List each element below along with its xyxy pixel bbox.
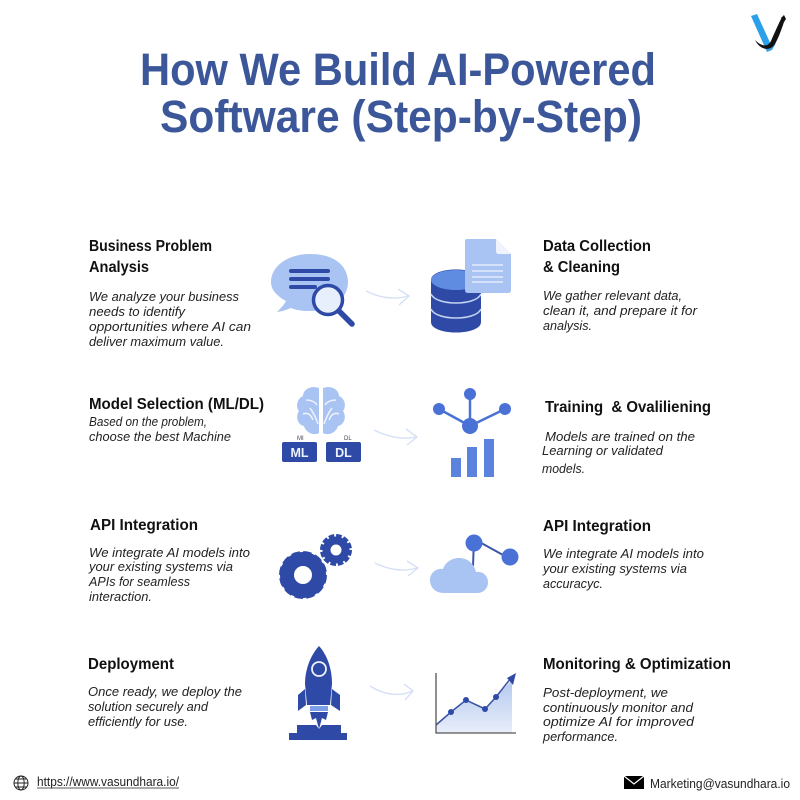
icon: database with document bbox=[431, 239, 511, 332]
step: deployment: Deployment bbox=[88, 656, 174, 673]
step: monitoring and optimization: continuously monitor and bbox=[543, 700, 694, 715]
icon: network and bar chart bbox=[433, 388, 511, 477]
step: API integration right: API Integration bbox=[543, 518, 651, 535]
step: model selection: choose the best Machine bbox=[89, 429, 231, 444]
footer: website link: https://www.vasundhara.io/ bbox=[37, 775, 179, 789]
title: How We Build AI-Powered bbox=[140, 44, 656, 95]
step: training and validation: Learning or validated bbox=[542, 443, 664, 458]
step: data collection and cleaning: analysis. bbox=[543, 318, 592, 333]
step: monitoring and optimization: Post-deployment, we bbox=[543, 685, 668, 700]
step: deployment: Once ready, we deploy the bbox=[88, 684, 242, 699]
icon: rocket bbox=[289, 646, 347, 740]
step: API integration left bbox=[88, 517, 250, 604]
step: data collection and cleaning: & Cleaning bbox=[543, 259, 620, 276]
step: business problem analysis: opportunities where AI can bbox=[89, 319, 251, 334]
icon: brain with ML and DL chips: DL bbox=[335, 446, 352, 460]
step: data collection and cleaning bbox=[543, 238, 698, 333]
step: monitoring and optimization: Monitoring & Optimization bbox=[543, 656, 731, 673]
step: API integration left: interaction. bbox=[89, 589, 152, 604]
step: business problem analysis bbox=[89, 238, 251, 349]
step: API integration right: accuracyc. bbox=[543, 576, 603, 591]
step: deployment: solution securely and bbox=[88, 699, 209, 714]
step: API integration left: We integrate AI models into bbox=[89, 545, 250, 560]
step: API integration right: We integrate AI models into bbox=[543, 546, 704, 561]
icon: brain with ML and DL chips bbox=[282, 387, 361, 462]
step: business problem analysis: needs to identify bbox=[89, 304, 187, 319]
step: monitoring and optimization: performance. bbox=[542, 729, 618, 744]
step: business problem analysis: Business Problem bbox=[89, 238, 212, 255]
step: API integration left: your existing systems via bbox=[88, 559, 233, 574]
step: training and validation: Models are trained on the bbox=[545, 429, 695, 444]
arrow 3 bbox=[375, 561, 418, 576]
title: Software (Step-by-Step) bbox=[160, 91, 642, 142]
logo bbox=[751, 14, 786, 52]
icon: brain with ML and DL chips: ML bbox=[290, 446, 309, 460]
icon: speech bubble with magnifier bbox=[271, 254, 352, 324]
step: API integration right bbox=[542, 518, 704, 591]
icon: cloud with nodes bbox=[430, 534, 518, 593]
step: deployment bbox=[88, 656, 242, 729]
step: training and validation: models. bbox=[542, 461, 585, 476]
arrow 2 bbox=[374, 429, 417, 445]
step: model selection: Based on the problem, bbox=[89, 414, 207, 429]
step: API integration right: your existing systems via bbox=[542, 561, 687, 576]
step: model selection: Model Selection (ML/DL) bbox=[89, 396, 264, 413]
step: deployment: efficiently for use. bbox=[88, 714, 188, 729]
footer: email contact: Marketing@vasundhara.io bbox=[650, 777, 790, 791]
icon: brain with ML and DL chips: MI bbox=[297, 436, 304, 442]
chart: monitoring line graph bbox=[436, 673, 516, 733]
icon: gears bbox=[282, 536, 350, 596]
step: API integration left: APIs for seamless bbox=[88, 574, 190, 589]
icon: brain with ML and DL chips: DL bbox=[344, 436, 352, 442]
step: data collection and cleaning: Data Collection bbox=[543, 238, 651, 255]
step: training and validation bbox=[542, 399, 711, 476]
step: data collection and cleaning: clean it, and prepare it for bbox=[543, 303, 698, 318]
step: business problem analysis: deliver maximum value. bbox=[89, 334, 224, 349]
step: API integration left: API Integration bbox=[90, 517, 198, 534]
title bbox=[140, 44, 656, 142]
step: business problem analysis: We analyze your business bbox=[89, 289, 239, 304]
step: data collection and cleaning: We gather relevant data, bbox=[543, 288, 682, 303]
step: model selection bbox=[89, 396, 264, 444]
step: monitoring and optimization: optimize AI for improved bbox=[543, 714, 695, 729]
arrow 1 bbox=[366, 289, 409, 305]
step: training and validation: Training & Ovaliliening bbox=[545, 399, 711, 416]
step: monitoring and optimization bbox=[542, 656, 731, 744]
step: business problem analysis: Analysis bbox=[89, 259, 149, 276]
arrow 4 bbox=[370, 684, 413, 700]
